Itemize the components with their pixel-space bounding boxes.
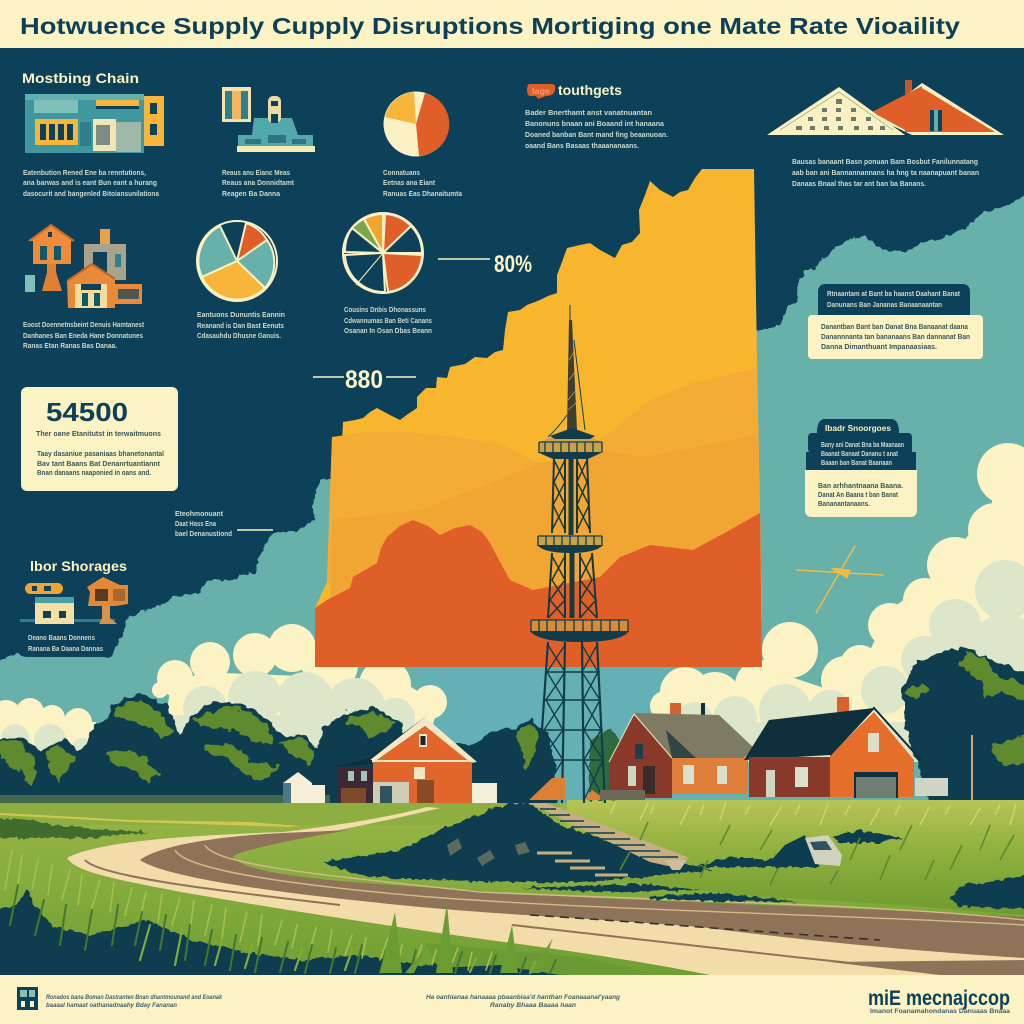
icon: drone <box>797 546 883 613</box>
text: factory description: Reaus ana Donnidtamt <box>222 180 295 187</box>
text: store description: Eatenbution Rened Ene ba renntutions, <box>23 170 146 177</box>
info card: lower right: Ban arhhantnaana Baana. <box>818 483 903 490</box>
info card: upper right: Danunans Ban Jananas Banaanaantan <box>827 302 942 309</box>
annotation with leader line: Eteohmonuant <box>175 511 224 518</box>
icon: storefront <box>25 94 164 153</box>
text: labor shortage panel: Ranana Ba Daana Dannas <box>28 646 103 653</box>
text: pie one description <box>383 170 462 198</box>
text: houses description: Danhanes Ban Eneda Hane Donnatunes <box>23 333 143 340</box>
platform: top <box>537 428 603 459</box>
chart: pie one <box>384 92 449 156</box>
tree: right <box>902 648 1024 805</box>
text: factory description: Reagen Ba Danna <box>222 191 280 198</box>
car wreck <box>770 835 842 866</box>
ground: grass fields <box>0 800 1024 975</box>
truck by house <box>915 778 948 796</box>
stat card: 54500: Taay dasaniue pasaniaas bhanetonantal <box>37 451 164 458</box>
text: roofline description: Bausas banaant Basn ponuan Bam Bosbut Fanilunnatang <box>792 159 978 166</box>
callout: 80% <box>438 251 532 278</box>
footer text: center <box>426 994 620 1009</box>
title banner: Hotwuence Supply Cupply Disruptions Mortiging one Mate Rate Vioaility <box>20 13 960 39</box>
info card: upper right: Danannnanta tan bananaans Ban dannanat Ban <box>821 334 970 341</box>
tree: behind tower right <box>590 728 622 800</box>
text: store description: dasocurit and bangenled Bitoiansunilationa <box>23 191 159 198</box>
info card: lower right <box>805 419 917 517</box>
callout: 880 <box>313 366 416 394</box>
stat card: 54500: Bav tant Baans Bat Denanrtuantiannt <box>37 461 161 468</box>
info card: lower right: Bany ani Danat Bna ba Maanaan <box>821 442 904 449</box>
chart: pie two <box>197 221 277 301</box>
text: pie one description: Ranuas Eas Dhanaitumta <box>383 191 462 198</box>
info card: lower right: Ibadr Snoorgoes <box>825 423 891 433</box>
annotation with leader line: Daat Hass Ena <box>175 521 216 528</box>
annotation with leader line <box>175 511 273 538</box>
footer text: center: Ha oanhianaa hanaaaa pbaanbiaa'd hanthan Foanaaanal'yaang <box>426 994 620 1001</box>
text: pie two description: Eantuons Dununtis Eannin <box>197 312 285 319</box>
tower base shed <box>529 778 606 800</box>
tower <box>530 305 629 803</box>
house: right two <box>744 697 921 798</box>
house: right one <box>600 703 754 800</box>
heading: labor shorages: lbor Shorages <box>30 559 127 574</box>
info card: upper right: Danna Dimanthuant Impanaasiaas. <box>821 344 937 351</box>
callout: 880: 880 <box>345 366 383 394</box>
text: touthgets description: Doaned banban Bant mand fing beaanuoan. <box>525 132 668 139</box>
grass detail: field right <box>520 802 1024 910</box>
text: houses description: Eoost Doennetnsbeint Denuis Hamtanest <box>23 322 145 329</box>
info card: lower right: Baaan ban Banat Baanaan <box>821 460 892 467</box>
footer text: left <box>46 994 222 1009</box>
chart: pie three <box>343 213 423 293</box>
text: store description <box>23 170 159 198</box>
text: touthgets description: oaand Bans Basaas thaaananaans. <box>525 143 639 150</box>
info card: lower right: Bananantanaans. <box>818 501 870 508</box>
trees: left treeline <box>0 695 560 810</box>
title banner <box>0 0 1024 48</box>
sky background <box>0 188 1024 810</box>
fence strip <box>0 795 330 803</box>
logo: Imanot Foanamahondanas Danuaas Bnaaa <box>870 1009 1011 1015</box>
footer icon <box>17 987 38 1010</box>
callout: 80%: 80% <box>494 251 532 278</box>
icon: houses group <box>25 225 142 308</box>
footer text: left: Ronados bana Boman Dastranten Bnan dhantmounand and Eoanak <box>46 994 222 1001</box>
heading: mostbing chain: Mostbing Chain <box>22 71 139 86</box>
text: touthgets description <box>525 110 668 150</box>
icon: factory building <box>222 87 315 152</box>
clouds: right <box>650 443 1024 762</box>
text: pie two description <box>197 312 285 340</box>
house: left <box>332 717 477 803</box>
lattice: upper section <box>552 455 590 535</box>
heading: touthgets with tag: lage <box>532 87 551 96</box>
grass: left foreground <box>0 850 660 985</box>
text: pie three description <box>344 307 432 335</box>
tree trunk <box>971 735 973 800</box>
heading: touthgets with tag: touthgets <box>558 83 622 98</box>
stat card: 54500: Bnan danaans naaponied in oans and. <box>37 470 151 477</box>
icon: roofline diagram <box>767 80 1004 135</box>
text: pie three description: Osanan In Osan Dbas Beann <box>344 328 432 335</box>
info card: upper right: Rtnaantam at Bant ba haanst Daahant Banat <box>827 291 961 298</box>
mound and stairs <box>323 803 712 882</box>
lattice: lower section <box>537 642 605 803</box>
text: labor shortage panel: Deano Baans Donnens <box>28 635 95 642</box>
heading: touthgets with tag <box>527 83 622 99</box>
icon: labor shortage buildings <box>20 577 128 624</box>
text: houses description: Ranas Etan Ranas Bas Danaa. <box>23 343 117 350</box>
info card: lower right: Baanat Banaat Dananu t anat <box>821 451 899 458</box>
info card: lower right: Danat An Baana t ban Banat <box>818 492 899 499</box>
footer text: center: Ranaby Bhaaa Baaaa haan <box>490 1002 576 1009</box>
clouds: left <box>0 624 447 770</box>
text: pie three description: Cousins Dnbis Dhonassuns <box>344 307 426 314</box>
text: roofline description: aab ban ani Bannannannans ha hng ta naanapuant banan <box>792 170 979 177</box>
stat card: 54500: Ther oane Etanitutst in terwaitmuons <box>36 431 161 438</box>
text: roofline description: Danaas Bnaal thas tar ant ban ba Banans. <box>792 181 926 188</box>
platform: lower <box>530 620 629 642</box>
road <box>67 807 1024 975</box>
text: touthgets description: Bader Bnerthamt anst vanatnuantan <box>525 110 652 117</box>
text: houses description <box>23 322 145 350</box>
spire <box>548 305 585 437</box>
text: roofline description <box>792 159 979 188</box>
text: touthgets description: Banonuns bnaan ani Boaand int hanaana <box>525 121 664 128</box>
text: pie two description: Cdasauhdu Dhusne Ganuis. <box>197 333 281 340</box>
stat card: 54500: 54500 <box>46 397 128 427</box>
stat card: 54500 <box>21 387 178 491</box>
text: pie one description: Eetnas ana Eiant <box>383 180 436 187</box>
text: pie three description: Cdwannumas Ban Beti Canans <box>344 318 432 325</box>
text: store description: ana barwas and is eant Bun eant a hurang <box>23 180 157 187</box>
text: pie one description: Connatuans <box>383 170 420 177</box>
small farm sheds <box>283 772 497 803</box>
annotation with leader line: bael Denanustiond <box>175 531 232 538</box>
text: factory description: Reaus anu Eianc Meas <box>222 170 290 177</box>
main area chart <box>315 169 762 667</box>
lattice: middle section <box>548 553 597 618</box>
platform: middle <box>537 536 603 553</box>
info card: upper right: Danantban Bant ban Danat Bna Banaanat daana <box>821 324 968 331</box>
text: labor shortage panel <box>18 630 112 657</box>
text: factory description <box>222 170 295 198</box>
footer text: left: baaaal hamaat oathanadnaahy Bday Fananan <box>46 1002 177 1009</box>
footer <box>0 975 1024 1024</box>
info card: upper right <box>808 284 983 359</box>
text: pie two description: Reanand is Dan Bast Eenuts <box>197 323 284 330</box>
